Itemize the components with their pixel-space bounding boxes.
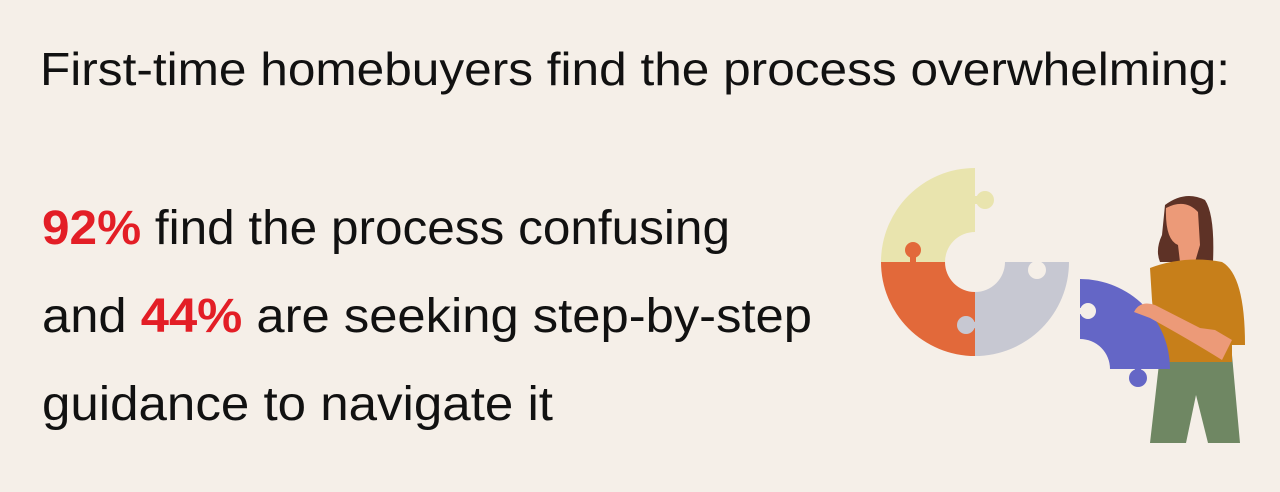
shirt <box>1150 260 1245 362</box>
blue puzzle piece <box>1080 279 1170 369</box>
arm <box>1134 304 1232 360</box>
body text <box>42 202 812 431</box>
face and neck <box>1166 204 1200 262</box>
line 1: 92% find the process confusing <box>42 202 730 255</box>
pants <box>1150 355 1240 443</box>
hair <box>1158 196 1213 262</box>
line 2: and 44% are seeking step-by-step <box>42 290 812 343</box>
illustration: puzzle ring <box>881 168 1069 356</box>
illustration: woman <box>1079 196 1245 443</box>
line 3: guidance to navigate it <box>42 378 553 431</box>
title: First-time homebuyers find the process overwhelming: <box>40 43 1230 95</box>
